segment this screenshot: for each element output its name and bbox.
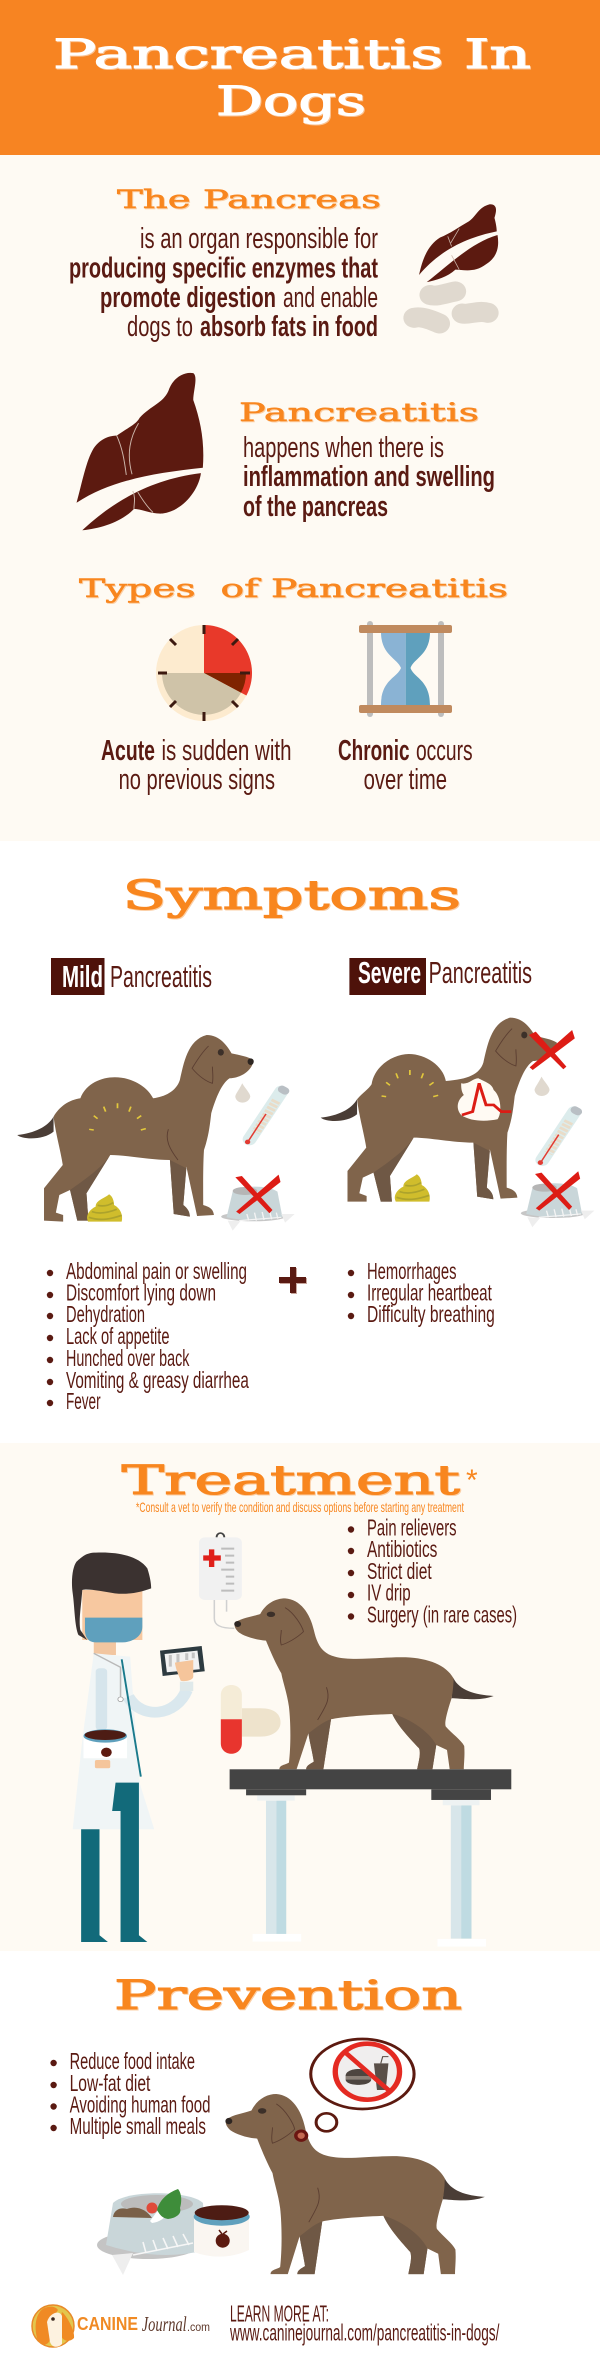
text block: pancreatitis description: of the pancreas xyxy=(243,491,388,523)
icon: small pancreas xyxy=(414,204,498,324)
logo: Canine Journal: .com xyxy=(187,2320,210,2334)
icon: dog collar ring xyxy=(296,2131,307,2140)
heading: Types of Pancreatitis: Types of Pancreatitis xyxy=(79,574,508,603)
icon: food bowl xyxy=(97,2189,206,2275)
list: severe symptoms: Irregular heartbeat xyxy=(367,1280,492,1306)
icon: mouth cross xyxy=(529,1030,575,1070)
label: Severe Pancreatitis: Severe xyxy=(358,955,421,990)
text block: pancreas description: absorb fats in food xyxy=(200,311,378,343)
icon: dog on table xyxy=(234,1598,494,1769)
icon: dog xyxy=(225,2094,485,2274)
panel: header xyxy=(0,0,600,155)
logo: Canine Journal: CANINE xyxy=(77,2314,138,2334)
illustration: treatment scene xyxy=(72,1533,511,1947)
label: Severe Pancreatitis: Pancreatitis xyxy=(429,955,532,990)
text block: chronic: Chronic xyxy=(338,735,410,767)
list: prevention tips: Reduce food intake xyxy=(70,2048,195,2074)
icon: heart with ECG xyxy=(458,1078,511,1121)
title: Dogs xyxy=(216,79,366,125)
list: treatments xyxy=(348,1515,517,1628)
list: prevention tips: Avoiding human food xyxy=(70,2092,210,2118)
icon: hourglass xyxy=(359,621,452,717)
logo: Canine Journal xyxy=(32,2305,210,2347)
icon: plus xyxy=(279,1267,306,1293)
list: treatments: IV drip xyxy=(367,1580,411,1606)
text block: acute: is sudden with xyxy=(162,735,292,767)
text block: learn more xyxy=(229,2301,500,2346)
icon: pills xyxy=(221,1685,281,1754)
illustration: mild dog xyxy=(17,1035,295,1231)
list: prevention tips: Multiple small meals xyxy=(70,2113,206,2139)
text block: pancreas description: promote digestion xyxy=(100,282,276,314)
text block: pancreas description: and enable xyxy=(283,282,378,314)
list: prevention tips xyxy=(50,2048,211,2139)
label: Mild Pancreatitis: Pancreatitis xyxy=(110,959,212,994)
title: Pancreatitis In xyxy=(53,32,531,78)
panel: treatment xyxy=(0,1443,600,1951)
icon: clock xyxy=(156,625,252,721)
list: mild symptoms: Fever xyxy=(66,1388,101,1414)
text block: chronic: over time xyxy=(364,764,447,796)
heading: Pancreatitis: Pancreatitis xyxy=(239,398,479,427)
text block: acute xyxy=(101,735,292,796)
text block: acute: no previous signs xyxy=(119,764,275,796)
list: treatments: Antibiotics xyxy=(367,1536,437,1562)
heading: Treatment: Treatment xyxy=(122,1458,460,1504)
text block: pancreatitis description xyxy=(243,432,495,523)
list: severe symptoms xyxy=(348,1258,495,1327)
label: Mild Pancreatitis: Mild xyxy=(62,959,103,994)
list: severe symptoms: Difficulty breathing xyxy=(367,1301,495,1327)
logo: Canine Journal: Journal xyxy=(142,2312,187,2336)
icon: IV bag xyxy=(199,1533,242,1628)
text block: learn more: LEARN MORE AT: xyxy=(230,2301,329,2327)
list: mild symptoms: Lack of appetite xyxy=(66,1323,170,1349)
label: Severe Pancreatitis xyxy=(349,955,532,995)
list: mild symptoms: Dehydration xyxy=(66,1301,145,1327)
panel: the pancreas and types xyxy=(0,155,600,841)
illustration: severe dog xyxy=(321,1018,594,1227)
footnote marker: * xyxy=(466,1464,478,1497)
list: treatments: Surgery (in rare cases) xyxy=(367,1602,517,1628)
list: mild symptoms: Discomfort lying down xyxy=(66,1280,216,1306)
panel: symptoms xyxy=(0,841,600,1443)
icon: vet xyxy=(72,1552,205,1942)
text block: pancreatitis description: happens when there is xyxy=(243,432,444,464)
title xyxy=(53,32,531,125)
text block: acute: Acute xyxy=(101,735,155,767)
text block: chronic xyxy=(338,735,473,796)
text block: pancreas description: producing specific enzymes that xyxy=(69,252,378,284)
icon: food tub xyxy=(194,2205,250,2257)
heading: Symptoms: Symptoms xyxy=(122,873,461,919)
icon: table xyxy=(230,1769,511,1947)
list: severe symptoms: Hemorrhages xyxy=(367,1258,456,1284)
heading: The Pancreas: The Pancreas xyxy=(117,185,381,214)
list: treatments: Pain relievers xyxy=(367,1515,456,1541)
icon: thought bubble xyxy=(311,2039,414,2131)
label: Mild Pancreatitis xyxy=(51,958,212,995)
text block: pancreas description: dogs to xyxy=(127,311,193,343)
heading: Prevention: Prevention xyxy=(114,1973,462,2019)
text block: pancreatitis description: inflammation and swelling xyxy=(243,461,495,493)
illustration: prevention scene xyxy=(225,2039,485,2274)
list: treatments: Strict diet xyxy=(367,1558,432,1584)
list: mild symptoms: Abdominal pain or swelling xyxy=(66,1258,247,1284)
list: mild symptoms xyxy=(47,1258,249,1414)
list: mild symptoms: Vomiting & greasy diarrhea xyxy=(66,1367,249,1393)
icon: large pancreas xyxy=(77,373,203,530)
text block: chronic: occurs xyxy=(416,735,473,767)
list: mild symptoms: Hunched over back xyxy=(66,1345,190,1371)
list: prevention tips: Low-fat diet xyxy=(70,2070,151,2096)
panel: prevention xyxy=(0,1951,600,2363)
text block: pancreas description: is an organ responsible for xyxy=(140,223,378,255)
text block: pancreas description xyxy=(69,223,378,343)
